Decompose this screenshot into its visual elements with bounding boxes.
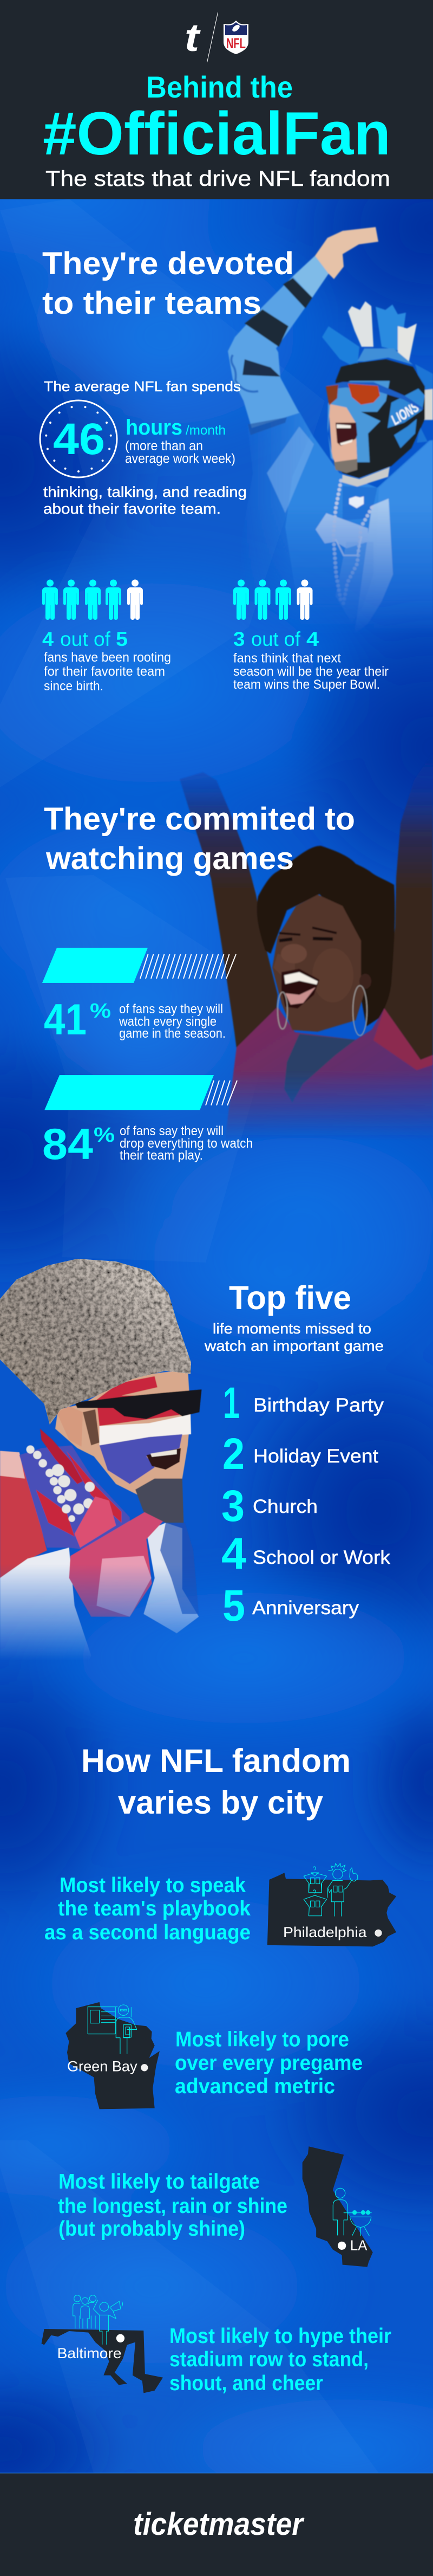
callout: Green Bay text: advanced metric [175,2075,335,2098]
list item 2: 2 [222,1429,245,1479]
list item 1: 1 [223,1378,240,1428]
stat: 3 out of 4: 4 [306,628,319,650]
intro text: The average NFL fan spends [44,378,241,394]
brows and eyes [279,928,337,935]
logo: ticketmaster t: t [185,16,201,60]
map: Maryland with cheering row icon: Baltimore [57,2345,121,2361]
stat: 84 percent: their team play. [120,1148,203,1163]
beads [333,481,341,601]
sunglasses [75,1389,201,1419]
icon: people row, 3 of 4 [233,580,313,620]
stat: hours per month: hours [126,416,182,439]
icon: jerseys and fan [304,1863,358,1916]
callout: Green Bay text [175,2028,363,2098]
panel: fandom by city [42,1743,396,2395]
ear [57,1406,83,1447]
mouth [336,423,357,446]
heading [44,801,355,876]
foam finger [75,1497,116,1548]
stat: 3 out of 4: season will be the year their [233,664,389,679]
panel: section 2, watching games [42,801,355,1169]
panel: top five [204,1279,391,1630]
chest and lower beads [143,1523,199,1633]
beard [135,1479,183,1523]
stat: 41 percent: 41 [44,995,87,1044]
heading: They're commited to [44,801,355,837]
logo: NFL shield [224,21,248,54]
callout: Baltimore text: stadium row to stand, [169,2348,369,2371]
stat: 41 percent: watch every single [119,1014,216,1029]
NFL jersey badge [349,496,364,508]
mouth [281,969,319,1008]
text: thinking, talking: about their favorite team. [43,501,221,517]
subheading: watch an important game [204,1338,384,1354]
text: thinking, talking [43,484,247,517]
stat: hours per month: (more than an [125,438,203,454]
callout: Philadelphia text [44,1874,251,1944]
heading: to their teams [42,286,261,321]
map: Wisconsin with analyst icon: Green Bay [67,2058,137,2074]
callout: LA text: Most likely to tailgate [58,2170,260,2193]
icon: analyst with clipboard [88,2005,137,2054]
red fleece coat [0,1451,47,1578]
arm [228,256,329,428]
callout: Philadelphia text: the team's playbook [58,1897,251,1920]
map: California with griller icon: LA [350,2237,368,2254]
title [43,70,391,167]
logo: ticketmaster wordmark: ticketmaster [133,2507,305,2542]
map: California with griller icon [303,2146,373,2267]
panel: footer [0,2473,433,2576]
text: thinking, talking: thinking, talking, and reading [43,484,247,500]
stat: 3 out of 4: fans think that next [233,651,341,665]
stat: 4 out of 5: out of [60,628,111,650]
stat: 84 percent: drop everything to watch [120,1136,253,1151]
callout: Baltimore text: Most likely to hype their [169,2325,391,2348]
list item 5: 5 [222,1581,245,1630]
stat: hours per month: /month [186,423,226,438]
heading: watching games [45,841,294,876]
face [55,1369,191,1495]
bar: 41 percent [42,948,236,983]
stat: 4 out of 5: for their favorite team [44,664,165,679]
photo: cheering woman [180,752,433,1143]
stat: 84 percent [42,1120,253,1169]
fur hat [0,1259,191,1425]
heading: Top five [229,1279,351,1316]
list item 5 [222,1581,359,1630]
photo: fan in fur hat and face paint [0,1259,201,1678]
goatee [334,459,357,473]
list item 2 [222,1429,378,1479]
stat: 84 percent: 84 [42,1120,93,1169]
title: Behind the [146,70,293,104]
right arm [384,752,433,1060]
stat: 84 percent: of fans say they will [120,1124,224,1138]
mohawk [348,301,373,347]
heading: How NFL fandom [81,1743,351,1779]
title: #OfficialFan [43,100,391,167]
face paint [97,1376,180,1426]
stat: 41 percent: % [90,1000,111,1022]
stat: hours per month: average work week) [125,451,235,466]
heading: varies by city [118,1784,324,1821]
nose [281,944,307,963]
head mask [334,359,425,478]
callout: LA text: the longest, rain or shine [58,2195,287,2218]
stat: 41 percent [44,995,226,1044]
callout: Philadelphia text: Most likely to speak [60,1874,246,1897]
stat: hours per month [125,416,235,466]
heading [42,246,294,321]
list item 3 [221,1481,318,1531]
callout: LA text: (but probably shine) [58,2217,245,2241]
stat: 4 out of 5: since birth. [44,679,103,694]
face [272,895,364,1032]
icon: clock with 46 [40,400,117,477]
list item 4: School or Work [253,1547,391,1568]
icon: cheering row with megaphone [73,2295,123,2345]
list item 4: 4 [221,1529,246,1578]
heading: They're devoted [42,246,294,281]
stat: 4 out of 5: 5 [116,628,128,650]
subheading: life moments missed to [213,1321,371,1337]
list item 5: Anniversary [252,1597,359,1619]
stat: 4 out of 5: 4 [42,628,54,650]
stat: 4 out of 5: fans have been rooting [44,650,171,665]
beads [26,1445,95,1522]
map: Pennsylvania with jerseys icon: Philadelphia [283,1924,368,1940]
stat: 84 percent: % [94,1124,115,1147]
stat: 3 out of 4: team wins the Super Bowl. [233,677,380,692]
callout: Green Bay text: over every pregame [175,2051,363,2075]
icon: griller at barbecue [333,2188,371,2236]
list item 1 [223,1378,384,1428]
stat: 4 out of 5 [42,580,171,694]
stat: 3 out of 4: 3 [233,628,245,650]
ear and earrings [359,974,371,989]
subtitle: The stats that drive NFL fandom [45,167,390,191]
logo: NFL shield: NFL [226,35,246,51]
stat: 41 percent: game in the season. [119,1026,226,1041]
map: Wisconsin with analyst icon [65,2002,160,2109]
callout: LA text [58,2170,287,2241]
callout: Baltimore text [169,2325,391,2395]
stat: 41 percent: of fans say they will [119,1002,223,1017]
list item 3: Church [253,1496,318,1517]
sunglasses [326,382,423,410]
list item 1: Birthday Party [253,1395,384,1416]
heading [81,1743,351,1821]
argyle scarf [19,1445,130,1553]
jersey body [252,412,312,601]
list item 4 [221,1529,391,1578]
bar: 84 percent [44,1075,237,1110]
icon: people row, 4 of 5 [42,580,143,620]
photo: masked Lions fan [228,227,433,639]
white fur trim [0,1548,91,1678]
left arm [180,772,278,1048]
hair [257,846,395,1026]
map: Maryland with cheering row icon [42,2295,163,2393]
icon: clock with 46: 46 [53,415,105,464]
list item 2: Holiday Event [253,1446,378,1467]
mouth [146,1448,181,1470]
panel: header [0,0,433,199]
hand [315,227,378,279]
list item 3: 3 [221,1481,245,1531]
callout: Green Bay text: Most likely to pore [175,2028,349,2051]
stat: 3 out of 4: out of [251,628,301,650]
map: Pennsylvania with jerseys icon [267,1863,396,1946]
callout: Baltimore text: shout, and cheer [169,2372,323,2395]
stat: 3 out of 4 [233,580,389,692]
shirt [225,1007,433,1143]
callout: Philadelphia text: as a second language [44,1921,251,1944]
subheading [204,1321,384,1354]
panel: section 1, devoted [40,246,389,694]
